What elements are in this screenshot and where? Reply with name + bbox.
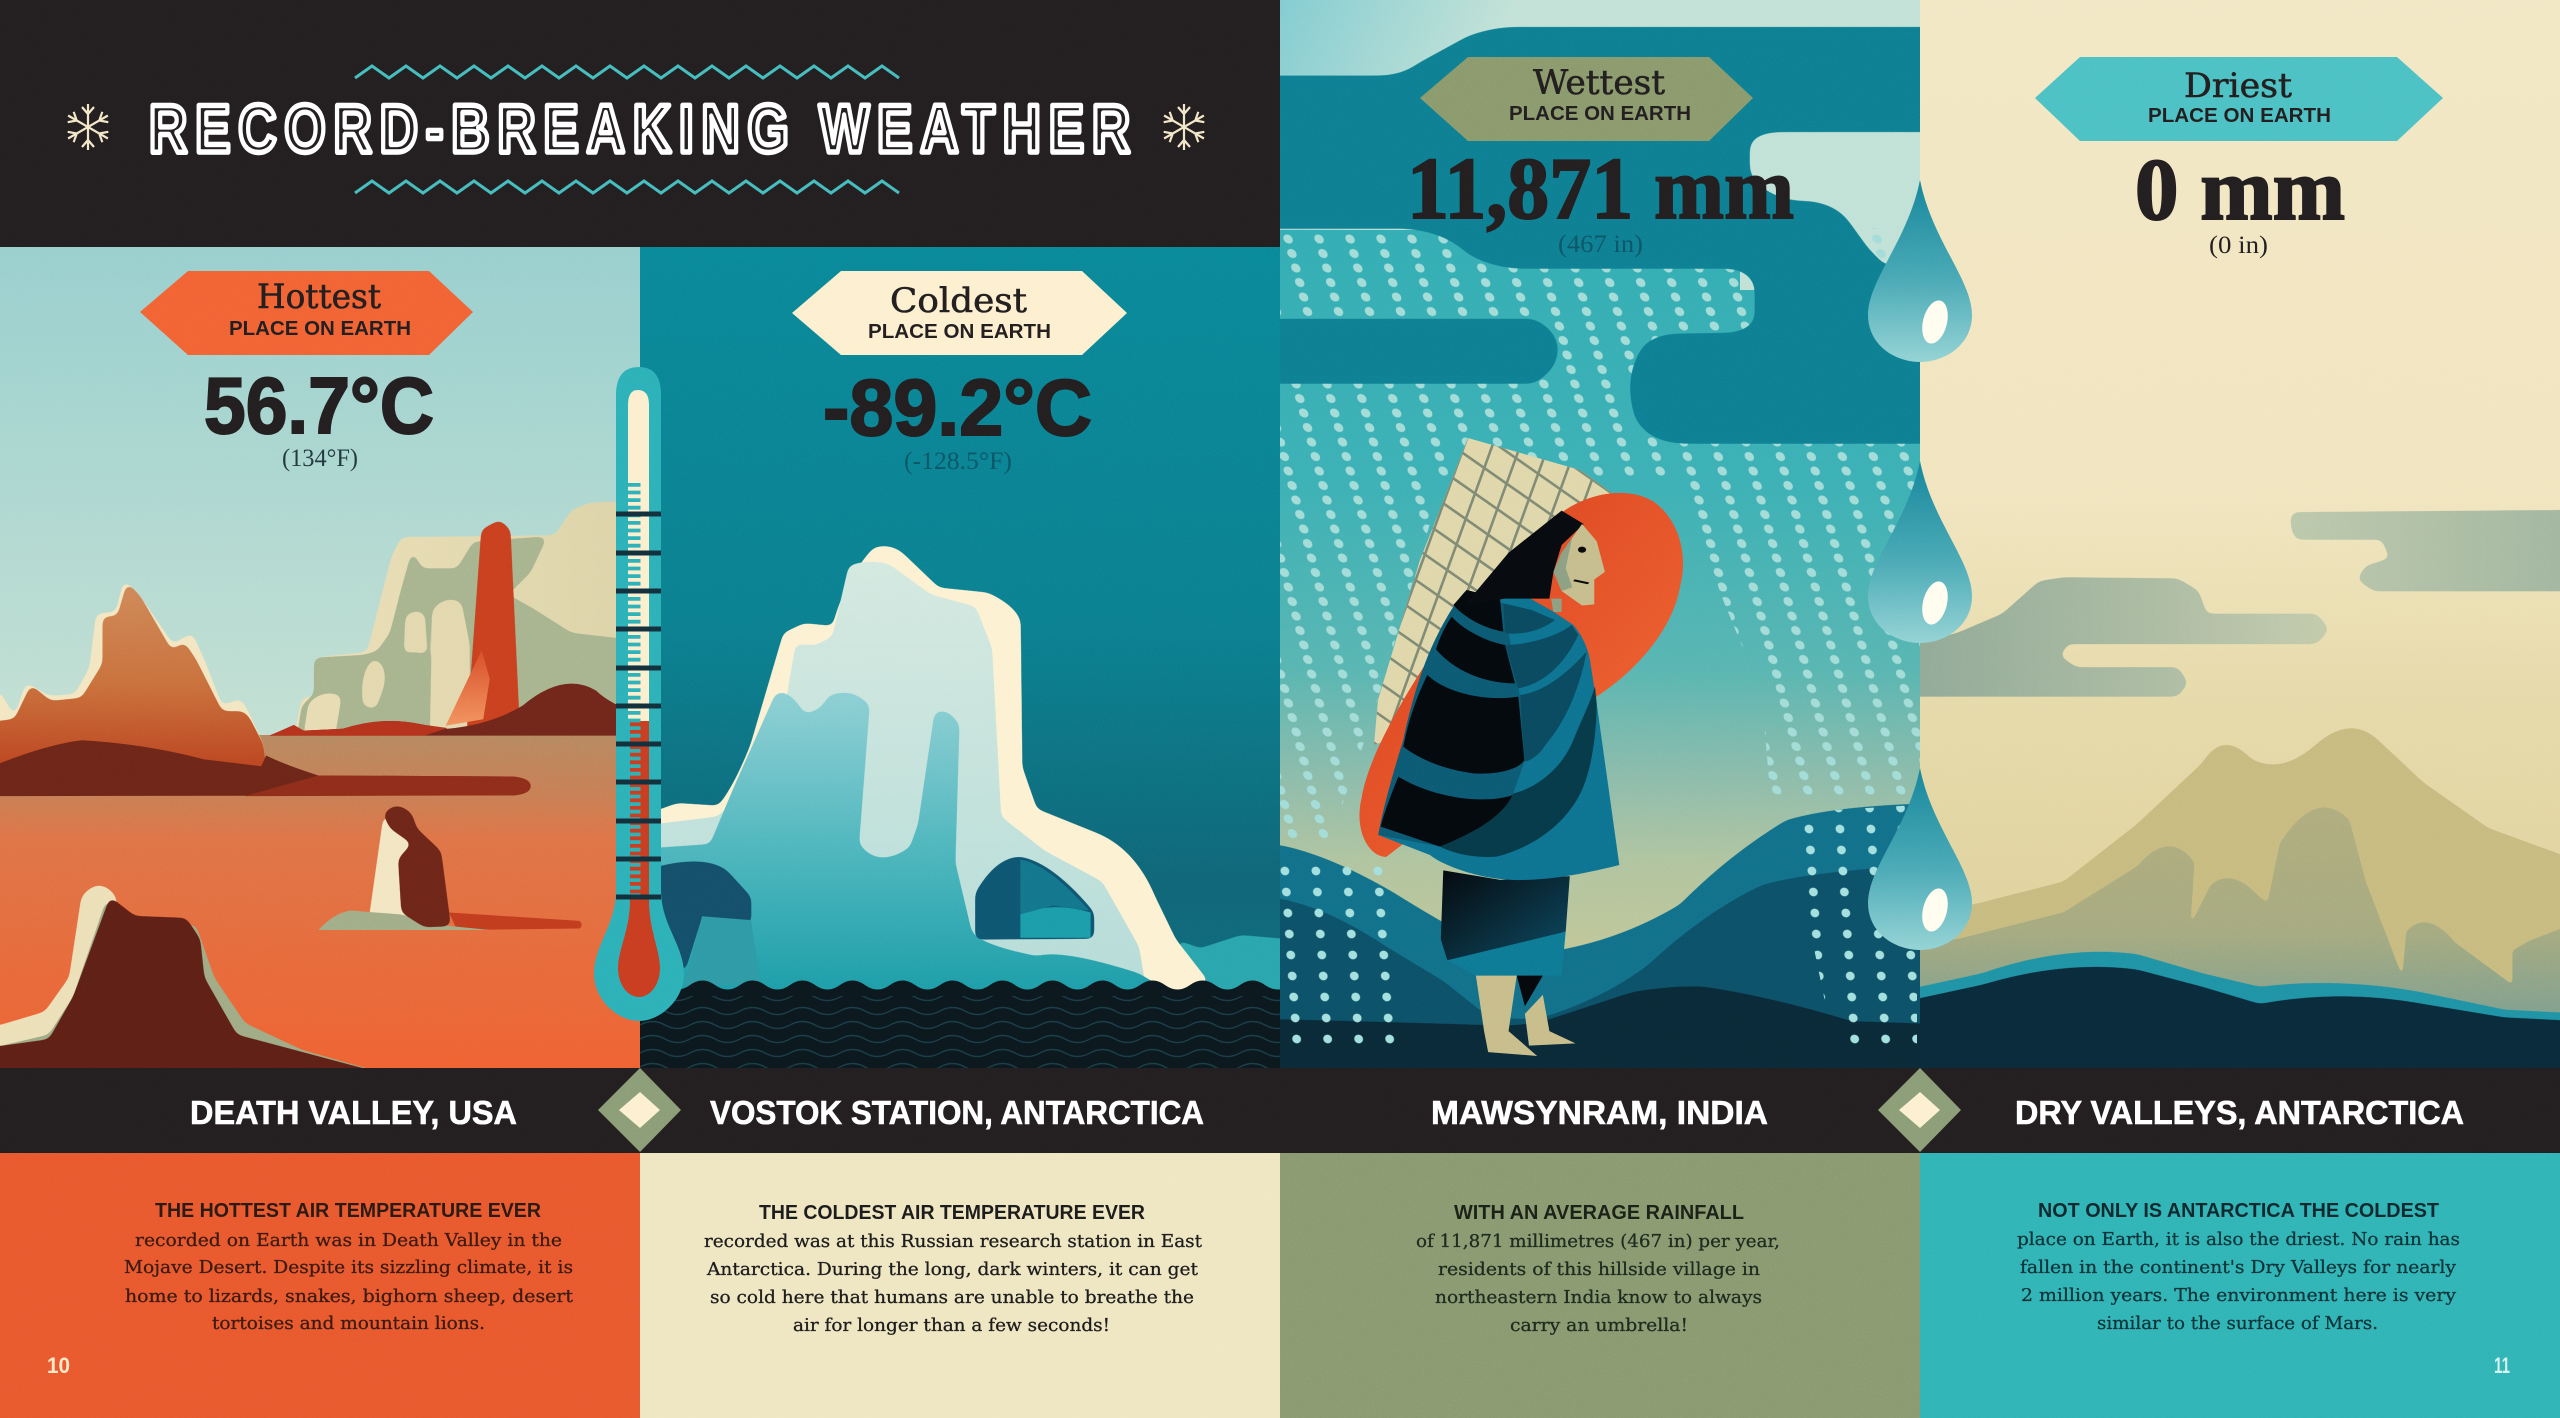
badge: wettest: PLACE ON EARTH: [1509, 103, 1691, 125]
hills: [1231, 803, 1966, 1092]
title banner: [0, 0, 1280, 247]
sky: [1280, 0, 1920, 230]
small rock: [318, 806, 582, 930]
panel: coldest text: [640, 1153, 1280, 1418]
face: [1553, 524, 1605, 606]
stat: hottest: (134°F): [282, 445, 358, 472]
location: Death Valley: DEATH VALLEY, USA: [190, 1094, 517, 1131]
body text: tortoises and mountain lions.: [212, 1313, 485, 1334]
icon: water drop 3: [1868, 768, 1972, 950]
body text: Mojave Desert. Despite its sizzling climate, it is: [124, 1257, 573, 1278]
panel: hottest text: THE HOTTEST AIR TEMPERATURE EVER: [155, 1200, 542, 1222]
maroon foothills: [269, 684, 640, 736]
dark ground: [1884, 967, 2560, 1092]
icon: snowflake right: [1161, 104, 1207, 150]
panel: driest text: [1920, 1153, 2560, 1418]
body text: [124, 1230, 574, 1334]
badge: driest: PLACE ON EARTH: [2148, 105, 2331, 127]
zigzag rule: top: [355, 66, 899, 78]
hair: [1464, 511, 1584, 606]
body text: residents of this hillside village in: [1438, 1259, 1760, 1280]
stat: wettest: (467 in): [1558, 231, 1643, 258]
panel: wettest text: WITH AN AVERAGE RAINFALL: [1454, 1202, 1744, 1224]
body text: [1416, 1231, 1780, 1336]
desert ground: [0, 735, 640, 1068]
body text: so cold here that humans are unable to breathe the: [710, 1287, 1194, 1308]
stat: hottest: 56.7°C: [204, 361, 434, 450]
stat: coldest: (-128.5°F): [904, 448, 1012, 475]
icon: snowflake left: [65, 104, 111, 150]
body text: fallen in the continent's Dry Valleys for nearly: [2020, 1257, 2457, 1278]
badge: hottest: PLACE ON EARTH: [229, 318, 411, 340]
badge: coldest: PLACE ON EARTH: [868, 321, 1051, 343]
badge: wettest: Wettest: [1533, 63, 1665, 103]
badge: wettest: [1420, 57, 1753, 141]
panel: wettest illustration: [1231, 0, 1966, 1092]
stat: driest: 0 mm: [2135, 142, 2345, 239]
orange rock: [0, 580, 531, 796]
panel: coldest illustration: [604, 247, 1339, 1068]
badge: coldest: Coldest: [890, 281, 1027, 321]
figure with umbrella basket: [1350, 310, 1694, 1056]
body text: 2 million years. The environment here is very: [2021, 1285, 2457, 1306]
diamond: right: [1878, 1068, 1961, 1152]
body text: recorded on Earth was in Death Valley in the: [135, 1230, 562, 1251]
teal wave: [1884, 952, 2560, 1054]
body text: northeastern India know to always: [1435, 1287, 1762, 1308]
legs: [1517, 976, 1543, 1006]
cloak with bands: [1378, 590, 1619, 880]
panel: hottest illustration: [0, 247, 678, 1092]
body text: recorded was at this Russian research station in East: [704, 1231, 1203, 1252]
panel: hottest text: [0, 1153, 640, 1418]
heading: RECORD-BREAKING WEATHER: [149, 91, 1130, 166]
mesa cliffs: [296, 502, 616, 730]
location: Vostok Station: VOSTOK STATION, ANTARCTICA: [710, 1094, 1204, 1131]
panel: driest text: NOT ONLY IS ANTARCTICA THE COLDEST: [2038, 1200, 2439, 1222]
icon: water drop 2: [1868, 461, 1972, 643]
rain dots: sky: [1280, 228, 1920, 843]
panel: coldest text: THE COLDEST AIR TEMPERATURE EVER: [759, 1202, 1146, 1224]
body text: [704, 1231, 1203, 1336]
diamond: left: [598, 1068, 681, 1152]
page number 10: 10: [47, 1353, 70, 1378]
icon: water drop 1: [1868, 180, 1972, 362]
stat: wettest: 11,871 mm: [1407, 141, 1794, 238]
pale cloud notch: [1740, 125, 1920, 290]
location: Mawsynram: MAWSYNRAM, INDIA: [1431, 1094, 1768, 1131]
skirt: [1441, 870, 1570, 960]
stat: coldest: -89.2°C: [823, 363, 1092, 452]
foreground rock: [0, 886, 457, 1092]
rain dots: hills: [1280, 805, 1917, 1050]
location: Dry Valleys: DRY VALLEYS, ANTARCTICA: [2015, 1094, 2464, 1131]
badge: hottest: [140, 271, 473, 355]
iceberg: [604, 546, 1339, 1000]
clouds: [2291, 510, 2560, 591]
tan mountain: [1884, 729, 2560, 1039]
page number 11: 11: [2494, 1353, 2510, 1378]
basket: [1350, 310, 1694, 943]
badge: driest: Driest: [2184, 66, 2292, 106]
black water with wave lines: [640, 980, 1290, 1068]
body text: place on Earth, it is also the driest. No rain has: [2017, 1229, 2460, 1250]
body text: Antarctica. During the long, dark winters, it can get: [706, 1259, 1199, 1280]
hood: [1359, 493, 1683, 857]
location bar: [0, 1068, 2560, 1153]
body text: home to lizards, snakes, bighorn sheep, desert: [125, 1286, 574, 1307]
body text: [2017, 1229, 2460, 1334]
stat: driest: (0 in): [2209, 232, 2268, 259]
body text: air for longer than a few seconds!: [793, 1315, 1110, 1336]
olive foothills: [1884, 808, 2560, 1039]
badge: hottest: Hottest: [257, 277, 381, 317]
badge: driest: [2035, 57, 2443, 141]
zigzag rule: bottom: [355, 181, 899, 193]
body text: similar to the surface of Mars.: [2097, 1313, 2378, 1334]
body text: carry an umbrella!: [1510, 1315, 1688, 1336]
panel: driest illustration: [1884, 0, 2560, 1092]
thermometer: [594, 367, 684, 1021]
panel: wettest text: [1280, 1153, 1920, 1418]
badge: coldest: [792, 271, 1127, 355]
dark clouds: [1231, 27, 1966, 443]
body text: of 11,871 millimetres (467 in) per year,: [1416, 1231, 1780, 1252]
